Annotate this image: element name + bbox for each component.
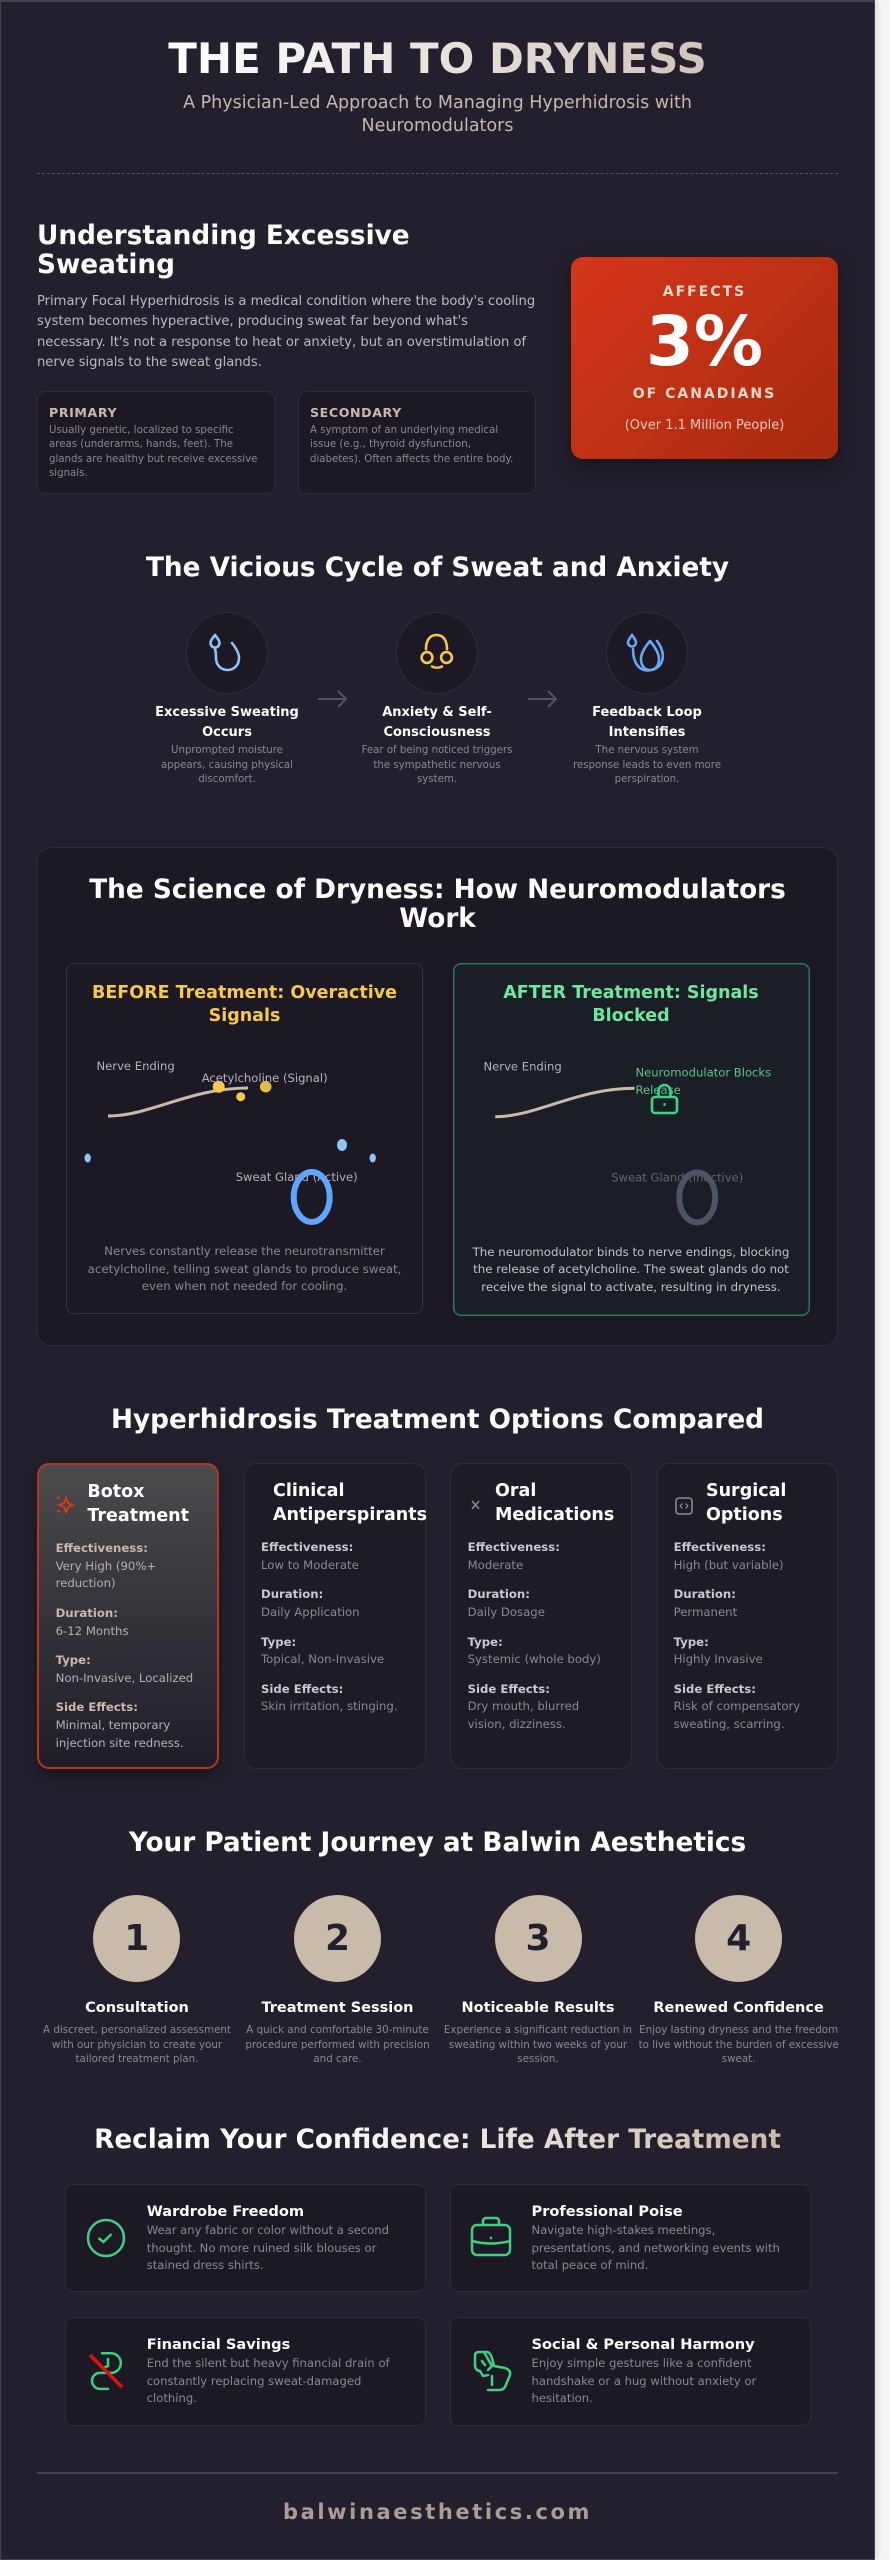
- professional description: [532, 2222, 780, 2275]
- affects label: AFFECTS: [663, 284, 746, 300]
- sweat droplets: [84, 1139, 376, 1162]
- subtitle: A Physician-Led Approach to Managing Hyperhidrosis with: [183, 92, 692, 112]
- oral title: Medications: [495, 1505, 614, 1525]
- nerve ending label: Nerve Ending: [483, 1060, 561, 1074]
- acetylcholine label: Acetylcholine (Signal): [202, 1071, 328, 1085]
- icon: code box: [675, 1497, 693, 1515]
- card: wardrobe freedom: [65, 2184, 426, 2292]
- social description: [532, 2355, 756, 2408]
- botox specs: injection site redness.: [56, 1736, 184, 1750]
- journey step 3: [438, 1895, 638, 2070]
- consultation description: tailored treatment plan.: [76, 2053, 198, 2065]
- wardrobe title: Wardrobe Freedom: [147, 2203, 304, 2220]
- professional title: Professional Poise: [532, 2203, 683, 2220]
- wardrobe description: stained dress shirts.: [147, 2258, 264, 2272]
- before description: acetylcholine, telling sweat glands to produce sweat,: [88, 1262, 401, 1276]
- intro paragraph: [37, 294, 535, 370]
- botox specs: Very High (90%+: [56, 1559, 156, 1573]
- icon: check circle: [84, 2216, 128, 2260]
- oral specs: Duration:: [468, 1587, 530, 1601]
- step 1 description: appears, causing physical: [161, 760, 293, 771]
- noticeable results description: session.: [517, 2053, 559, 2065]
- primary description: glands are healthy but receive excessive: [49, 454, 257, 465]
- arrow 2: [528, 690, 558, 708]
- secondary description: A symptom of an underlying medical: [310, 424, 498, 436]
- surgical title: Options: [706, 1505, 783, 1525]
- clinical specs: Effectiveness:: [261, 1540, 353, 1554]
- secondary description: diabetes). Often affects the entire body.: [310, 454, 513, 465]
- social description: hesitation.: [532, 2391, 593, 2405]
- oral specs: vision, dizziness.: [468, 1717, 566, 1731]
- sweat gland label: Sweat Gland (Active): [236, 1170, 358, 1184]
- financial description: constantly replacing sweat-damaged: [147, 2374, 361, 2388]
- after description: receive the signal to activate, resulting in dryness.: [481, 1280, 781, 1294]
- signal dots: [213, 1081, 272, 1101]
- diagram: blocked signals: [483, 1060, 771, 1226]
- journey step 1: [37, 1895, 237, 2070]
- after heading: Blocked: [592, 1006, 670, 1026]
- inactive sweat gland: [679, 1172, 715, 1222]
- step 3 description: response leads to even more: [573, 760, 721, 771]
- before description: [88, 1244, 401, 1293]
- noticeable results title: Noticeable Results: [462, 2000, 614, 2016]
- surgical specs: Duration:: [674, 1587, 736, 1601]
- website: balwinaesthetics.com: [283, 2500, 592, 2524]
- before description: Nerves constantly release the neurotransmitter: [104, 1244, 385, 1258]
- botox specs: 6-12 Months: [56, 1624, 129, 1638]
- professional description: total peace of mind.: [532, 2258, 648, 2272]
- step 3 description: perspiration.: [615, 774, 679, 785]
- social description: handshake or a hug without anxiety or: [532, 2374, 756, 2388]
- before heading: [92, 982, 397, 1026]
- surgical specs: Effectiveness:: [674, 1540, 766, 1554]
- journey step 4: [639, 1895, 839, 2070]
- financial description: [147, 2355, 390, 2408]
- stat callout: 3% of Canadians: [571, 257, 838, 459]
- botox specs: Side Effects:: [56, 1700, 138, 1714]
- heading: [89, 875, 786, 934]
- treatment session description: and care.: [313, 2053, 362, 2065]
- step 1 description: discomfort.: [198, 774, 256, 785]
- clinical title: Antiperspirants: [273, 1505, 427, 1525]
- oral specs: Type:: [468, 1635, 503, 1649]
- secondary description: issue (e.g., thyroid dysfunction,: [310, 439, 471, 450]
- botox specs: reduction): [56, 1576, 116, 1590]
- sweat gland label: Sweat Gland (Inactive): [611, 1170, 743, 1184]
- renewed confidence title: Renewed Confidence: [653, 2000, 824, 2016]
- number 3: [494, 1895, 582, 1982]
- primary description: [49, 424, 257, 479]
- wardrobe description: Wear any fabric or color without a second: [147, 2223, 389, 2237]
- clinical title: [273, 1481, 427, 1525]
- intro paragraph: Primary Focal Hyperhidrosis is a medical condition where the body's cooling: [37, 294, 535, 309]
- blocked label: Neuromodulator Blocks: [635, 1066, 771, 1080]
- treatment session title: Treatment Session: [261, 2000, 414, 2016]
- financial description: End the silent but heavy financial drain of: [147, 2356, 390, 2370]
- surgical specs: Side Effects:: [674, 1682, 756, 1696]
- botox specs: Duration:: [56, 1606, 118, 1620]
- primary label: PRIMARY: [49, 405, 117, 420]
- after description: The neuromodulator binds to nerve endings, blocking: [473, 1244, 789, 1258]
- after heading: AFTER Treatment: Signals: [503, 983, 759, 1003]
- oral specs: Effectiveness:: [468, 1540, 560, 1554]
- step 2 description: [362, 745, 512, 785]
- treatment session description: A quick and comfortable 30-minute: [246, 2024, 429, 2036]
- icon: pill: [472, 1500, 480, 1510]
- surgical specs: Permanent: [674, 1605, 737, 1619]
- before heading: Signals: [209, 1006, 280, 1026]
- step 2 description: system.: [417, 774, 457, 785]
- oral specs: Daily Dosage: [468, 1605, 545, 1619]
- clinical specs: [261, 1540, 398, 1713]
- primary description: signals.: [49, 468, 88, 479]
- step 1 description: [161, 745, 293, 785]
- number 1: [93, 1895, 180, 1982]
- step 1: [155, 612, 299, 785]
- oral specs: [468, 1540, 601, 1731]
- intro paragraph: nerve signals to the sweat glands.: [37, 355, 262, 370]
- heading: The Science of Dryness: How Neuromodulators: [89, 875, 786, 905]
- step 1 title: [155, 705, 299, 740]
- botox title: Treatment: [87, 1506, 189, 1526]
- oral specs: Side Effects:: [468, 1682, 550, 1696]
- consultation description: with our physician to create your: [52, 2039, 222, 2051]
- panel: understanding excessive sweating: [37, 220, 838, 494]
- social title: Social & Personal Harmony: [532, 2336, 755, 2353]
- clinical specs: Side Effects:: [261, 1682, 343, 1696]
- renewed confidence description: sweat.: [722, 2053, 755, 2065]
- secondary description: [310, 424, 513, 465]
- step 1 title: Occurs: [202, 725, 252, 740]
- botox specs: Non-Invasive, Localized: [56, 1671, 193, 1685]
- consultation description: A discreet, personalized assessment: [43, 2024, 231, 2036]
- botox title: [87, 1482, 189, 1526]
- section: treatment options: [37, 1405, 838, 1774]
- icon: briefcase: [469, 2214, 513, 2258]
- card: oral medications: [450, 1463, 632, 1769]
- number 4: 4: [726, 1918, 751, 1959]
- primary description: Usually genetic, localized to specific: [49, 424, 234, 436]
- before heading: BEFORE Treatment: Overactive: [92, 982, 397, 1002]
- after heading: [503, 983, 759, 1026]
- social description: Enjoy simple gestures like a confident: [532, 2356, 752, 2370]
- financial description: clothing.: [147, 2391, 197, 2405]
- professional description: presentations, and networking events with: [532, 2241, 780, 2255]
- of canadians label: OF CANADIANS: [633, 386, 776, 402]
- panel: science of dryness: [37, 846, 838, 1346]
- icon: lock: [652, 1085, 676, 1113]
- card: professional poise: [450, 2184, 810, 2292]
- renewed confidence description: to live without the burden of excessive: [639, 2039, 839, 2051]
- card: clinical antiperspirants: [244, 1463, 426, 1769]
- surgical title: Surgical: [706, 1481, 786, 1501]
- surgical specs: [674, 1539, 834, 1746]
- surgical specs: Highly Invasive: [674, 1652, 763, 1666]
- heading: [37, 220, 410, 280]
- card: primary: [37, 391, 275, 494]
- active sweat gland: [294, 1172, 330, 1222]
- nerve ending label: Nerve Ending: [96, 1059, 175, 1073]
- heading: Sweating: [37, 250, 175, 280]
- icon: sparkle: [56, 1496, 75, 1514]
- intro paragraph: system becomes hyperactive, producing sweat far beyond what's: [37, 314, 468, 329]
- clinical specs: Low to Moderate: [261, 1558, 359, 1572]
- card: social and personal harmony: [450, 2317, 810, 2426]
- number 2: 2: [325, 1918, 350, 1959]
- surgical title: [706, 1480, 786, 1527]
- step 2 title: Consciousness: [383, 725, 491, 740]
- heading: The Vicious Cycle of Sweat and Anxiety: [146, 553, 729, 583]
- consultation title: Consultation: [85, 2000, 189, 2016]
- number 3: 3: [525, 1918, 551, 1959]
- intro paragraph: necessary. It's not a response to heat or anxiety, but an overstimulation of: [37, 335, 526, 350]
- panel: after treatment: [452, 963, 810, 1316]
- oral specs: Moderate: [468, 1558, 523, 1572]
- heading: Your Patient Journey at Balwin Aesthetics: [129, 1828, 746, 1858]
- heading: Understanding Excessive: [37, 220, 410, 250]
- nerve curve: [495, 1088, 634, 1117]
- botox specs: [56, 1541, 193, 1750]
- panel: before treatment: [66, 963, 423, 1314]
- icon: sweat drop: [186, 612, 268, 694]
- step 3 description: The nervous system: [595, 745, 699, 756]
- botox specs: Minimal, temporary: [56, 1718, 170, 1732]
- noticeable results description: sweating within two weeks of your: [449, 2039, 627, 2051]
- 3% figure: 3%: [646, 302, 763, 382]
- section: patient journey: [37, 1825, 838, 2070]
- botox specs: Type:: [56, 1653, 91, 1667]
- subtitle: Neuromodulators: [362, 116, 513, 136]
- surgical specs: sweating, scarring.: [674, 1717, 785, 1731]
- over 1.1 million: (Over 1.1 Million People): [625, 418, 784, 433]
- number 4: [695, 1895, 782, 1982]
- section: vicious cycle: [146, 553, 729, 785]
- heading: Hyperhidrosis Treatment Options Compared: [111, 1405, 764, 1435]
- botox title: Botox: [87, 1482, 144, 1502]
- after description: [472, 1244, 789, 1294]
- step 1 description: Unprompted moisture: [171, 745, 283, 756]
- number 1: 1: [124, 1918, 149, 1959]
- wardrobe description: thought. No more ruined silk blouses or: [147, 2241, 376, 2255]
- footer rule: [37, 2472, 838, 2474]
- wardrobe description: [147, 2222, 389, 2275]
- diagram: overactive signals: [84, 1059, 376, 1225]
- card: surgical options: [657, 1463, 838, 1769]
- step 3: [573, 612, 721, 785]
- title: THE PATH TO DRYNESS: [168, 34, 707, 83]
- renewed confidence description: [639, 2023, 839, 2067]
- header: [37, 34, 838, 174]
- clinical specs: Skin irritation, stinging.: [261, 1699, 398, 1713]
- arrow 1: [318, 690, 348, 708]
- surgical specs: Type:: [674, 1635, 709, 1649]
- treatment session description: [238, 2023, 438, 2067]
- journey step 2: [238, 1895, 438, 2070]
- card: financial savings: [65, 2317, 426, 2426]
- card: botox: [37, 1463, 219, 1769]
- heading: Reclaim Your Confidence: Life After Treatment: [94, 2125, 781, 2155]
- step 3 description: [573, 745, 721, 785]
- financial title: Financial Savings: [147, 2336, 290, 2353]
- noticeable results description: Experience a significant reduction in: [444, 2024, 632, 2036]
- surgical specs: High (but variable): [674, 1558, 784, 1572]
- step 3 title: Feedback Loop: [592, 705, 702, 720]
- blocked label line 2: Release: [635, 1083, 680, 1097]
- number 2: [294, 1895, 381, 1982]
- step 2 title: Anxiety & Self-: [382, 705, 492, 720]
- step 2 description: the sympathetic nervous: [373, 760, 501, 771]
- step 2 description: Fear of being noticed triggers: [362, 745, 512, 756]
- step 2 title: [382, 705, 492, 740]
- icon: crossed chain: [84, 2349, 128, 2393]
- primary description: areas (underarms, hands, feet). The: [49, 439, 233, 450]
- oral title: [495, 1481, 614, 1525]
- clinical title: Clinical: [273, 1481, 344, 1501]
- oral title: Oral: [495, 1481, 536, 1501]
- clinical specs: Type:: [261, 1635, 296, 1649]
- subtitle: [183, 92, 692, 136]
- step 1 title: Excessive Sweating: [155, 705, 299, 720]
- oral specs: Systemic (whole body): [468, 1652, 601, 1666]
- secondary label: SECONDARY: [310, 405, 402, 420]
- before description: even when not needed for cooling.: [142, 1279, 347, 1293]
- botox specs: Effectiveness:: [56, 1541, 148, 1555]
- heading: Work: [399, 904, 476, 934]
- professional description: Navigate high-stakes meetings,: [532, 2223, 715, 2237]
- card: secondary: [298, 391, 536, 494]
- clinical specs: Duration:: [261, 1587, 323, 1601]
- step 3 title: Intensifies: [609, 725, 685, 740]
- clinical specs: Daily Application: [261, 1605, 360, 1619]
- treatment session description: procedure performed with precision: [245, 2039, 430, 2051]
- clinical specs: Topical, Non-Invasive: [261, 1652, 384, 1666]
- nerve curve: [108, 1088, 248, 1116]
- oral specs: Dry mouth, blurred: [468, 1699, 579, 1713]
- dashed divider: [37, 173, 838, 174]
- after description: the release of acetylcholine. The sweat glands do not: [473, 1262, 789, 1276]
- icon: handshake: [470, 2349, 514, 2393]
- consultation description: [37, 2023, 237, 2067]
- step 2: [362, 612, 512, 785]
- noticeable results description: [438, 2023, 638, 2067]
- surgical specs: Risk of compensatory: [674, 1699, 800, 1713]
- section: life after treatment: [37, 2120, 838, 2430]
- icon: multiple sweat drops: [606, 612, 688, 694]
- renewed confidence description: Enjoy lasting dryness and the freedom: [639, 2024, 838, 2036]
- step 3 title: [592, 705, 702, 740]
- icon: anxious face: [396, 612, 478, 694]
